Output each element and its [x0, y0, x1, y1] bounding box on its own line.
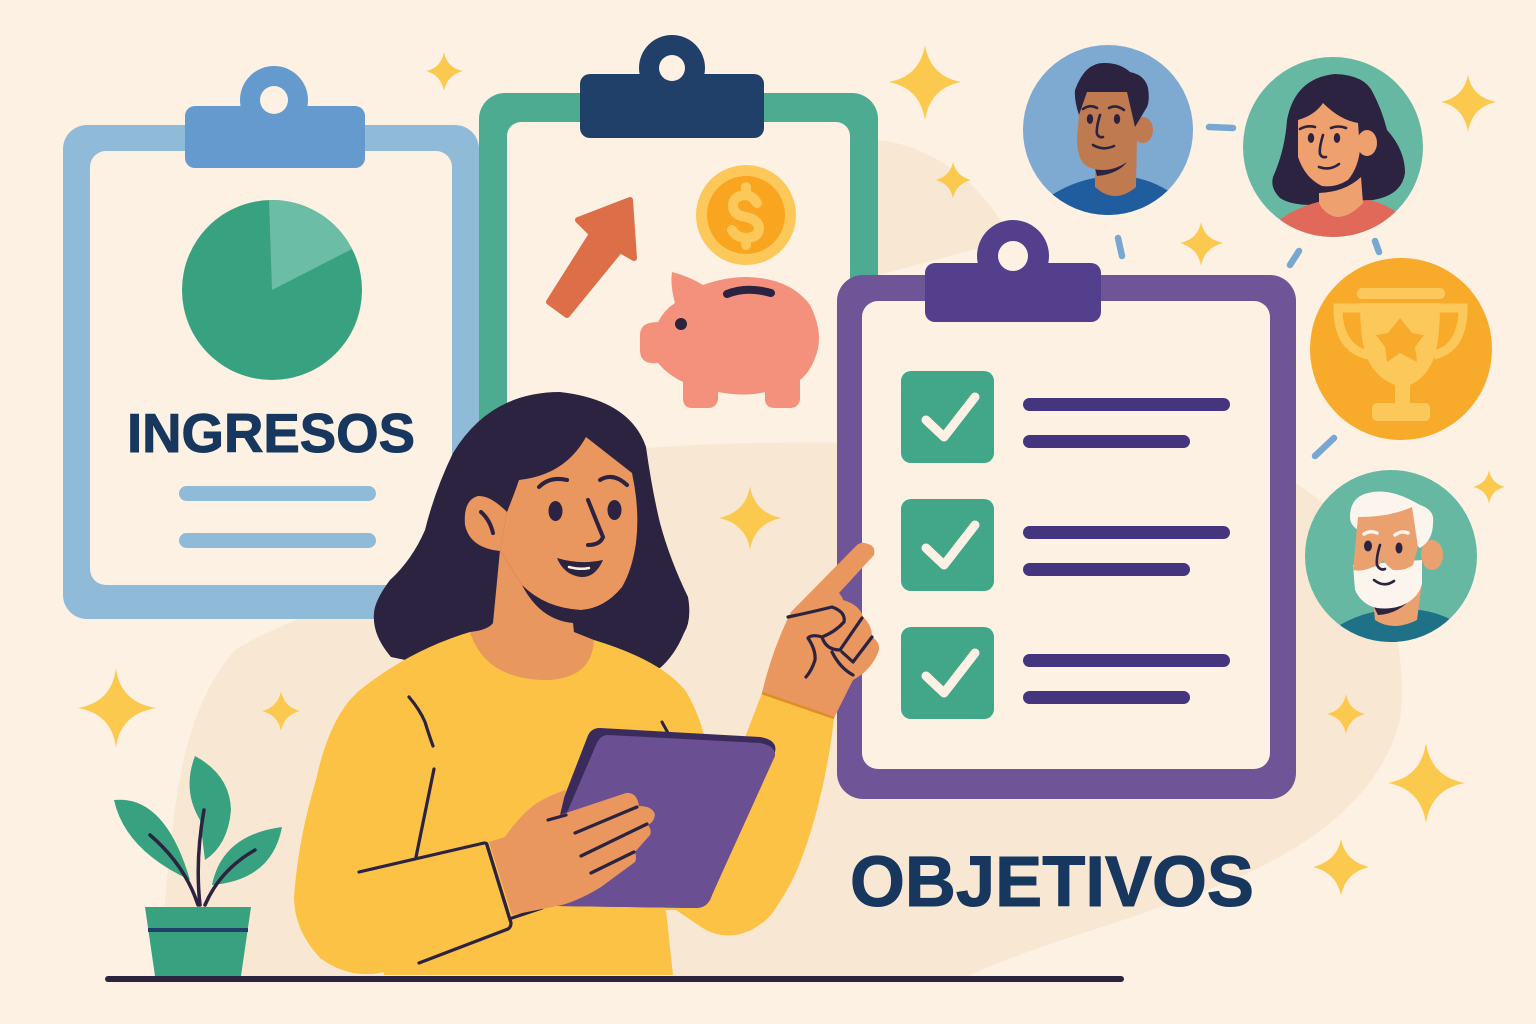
panel: objectives clipboard — [837, 220, 1296, 799]
background patch over clipboard base — [600, 442, 860, 780]
person: woman with tablet — [294, 392, 879, 975]
ear — [465, 496, 507, 551]
eyes — [548, 501, 562, 521]
heading: objetivos: OBJETIVOS — [850, 843, 1254, 922]
panel: ingresos clipboard — [63, 66, 479, 619]
checklist item 2 — [901, 499, 1230, 591]
plant in pot — [114, 756, 282, 976]
connector dashes — [1118, 127, 1379, 456]
clip: ingresos clipboard — [185, 66, 365, 168]
sweater — [294, 632, 834, 975]
clip: savings clipboard — [580, 35, 764, 138]
pie chart — [182, 200, 362, 380]
heading: ingresos: INGRESOS — [127, 402, 415, 464]
brows, nose and ear line — [481, 477, 627, 545]
panel: savings clipboard — [479, 35, 878, 780]
icon: dollar coin — [696, 165, 796, 265]
pen stub — [662, 722, 668, 733]
checklist item 3 — [901, 627, 1230, 719]
avatar: woman — [1243, 57, 1423, 245]
ground line — [105, 976, 1124, 982]
pointing hand — [762, 543, 879, 718]
smile — [557, 558, 603, 577]
text lines: ingresos — [179, 486, 376, 548]
tablet hand — [489, 790, 655, 915]
checklist item 1 — [901, 371, 1230, 463]
face — [500, 437, 637, 610]
decorative sparkles — [78, 45, 1505, 896]
avatar: older man — [1305, 470, 1477, 650]
neck — [470, 550, 594, 680]
sweater folds — [359, 697, 542, 963]
hair — [374, 392, 689, 680]
icon: trophy medal — [1310, 258, 1492, 440]
clip: objectives clipboard — [925, 220, 1101, 322]
icon: growth arrow — [549, 200, 634, 315]
icon: piggy bank — [640, 272, 819, 408]
tablet — [558, 728, 775, 908]
avatar: man — [1023, 45, 1193, 220]
